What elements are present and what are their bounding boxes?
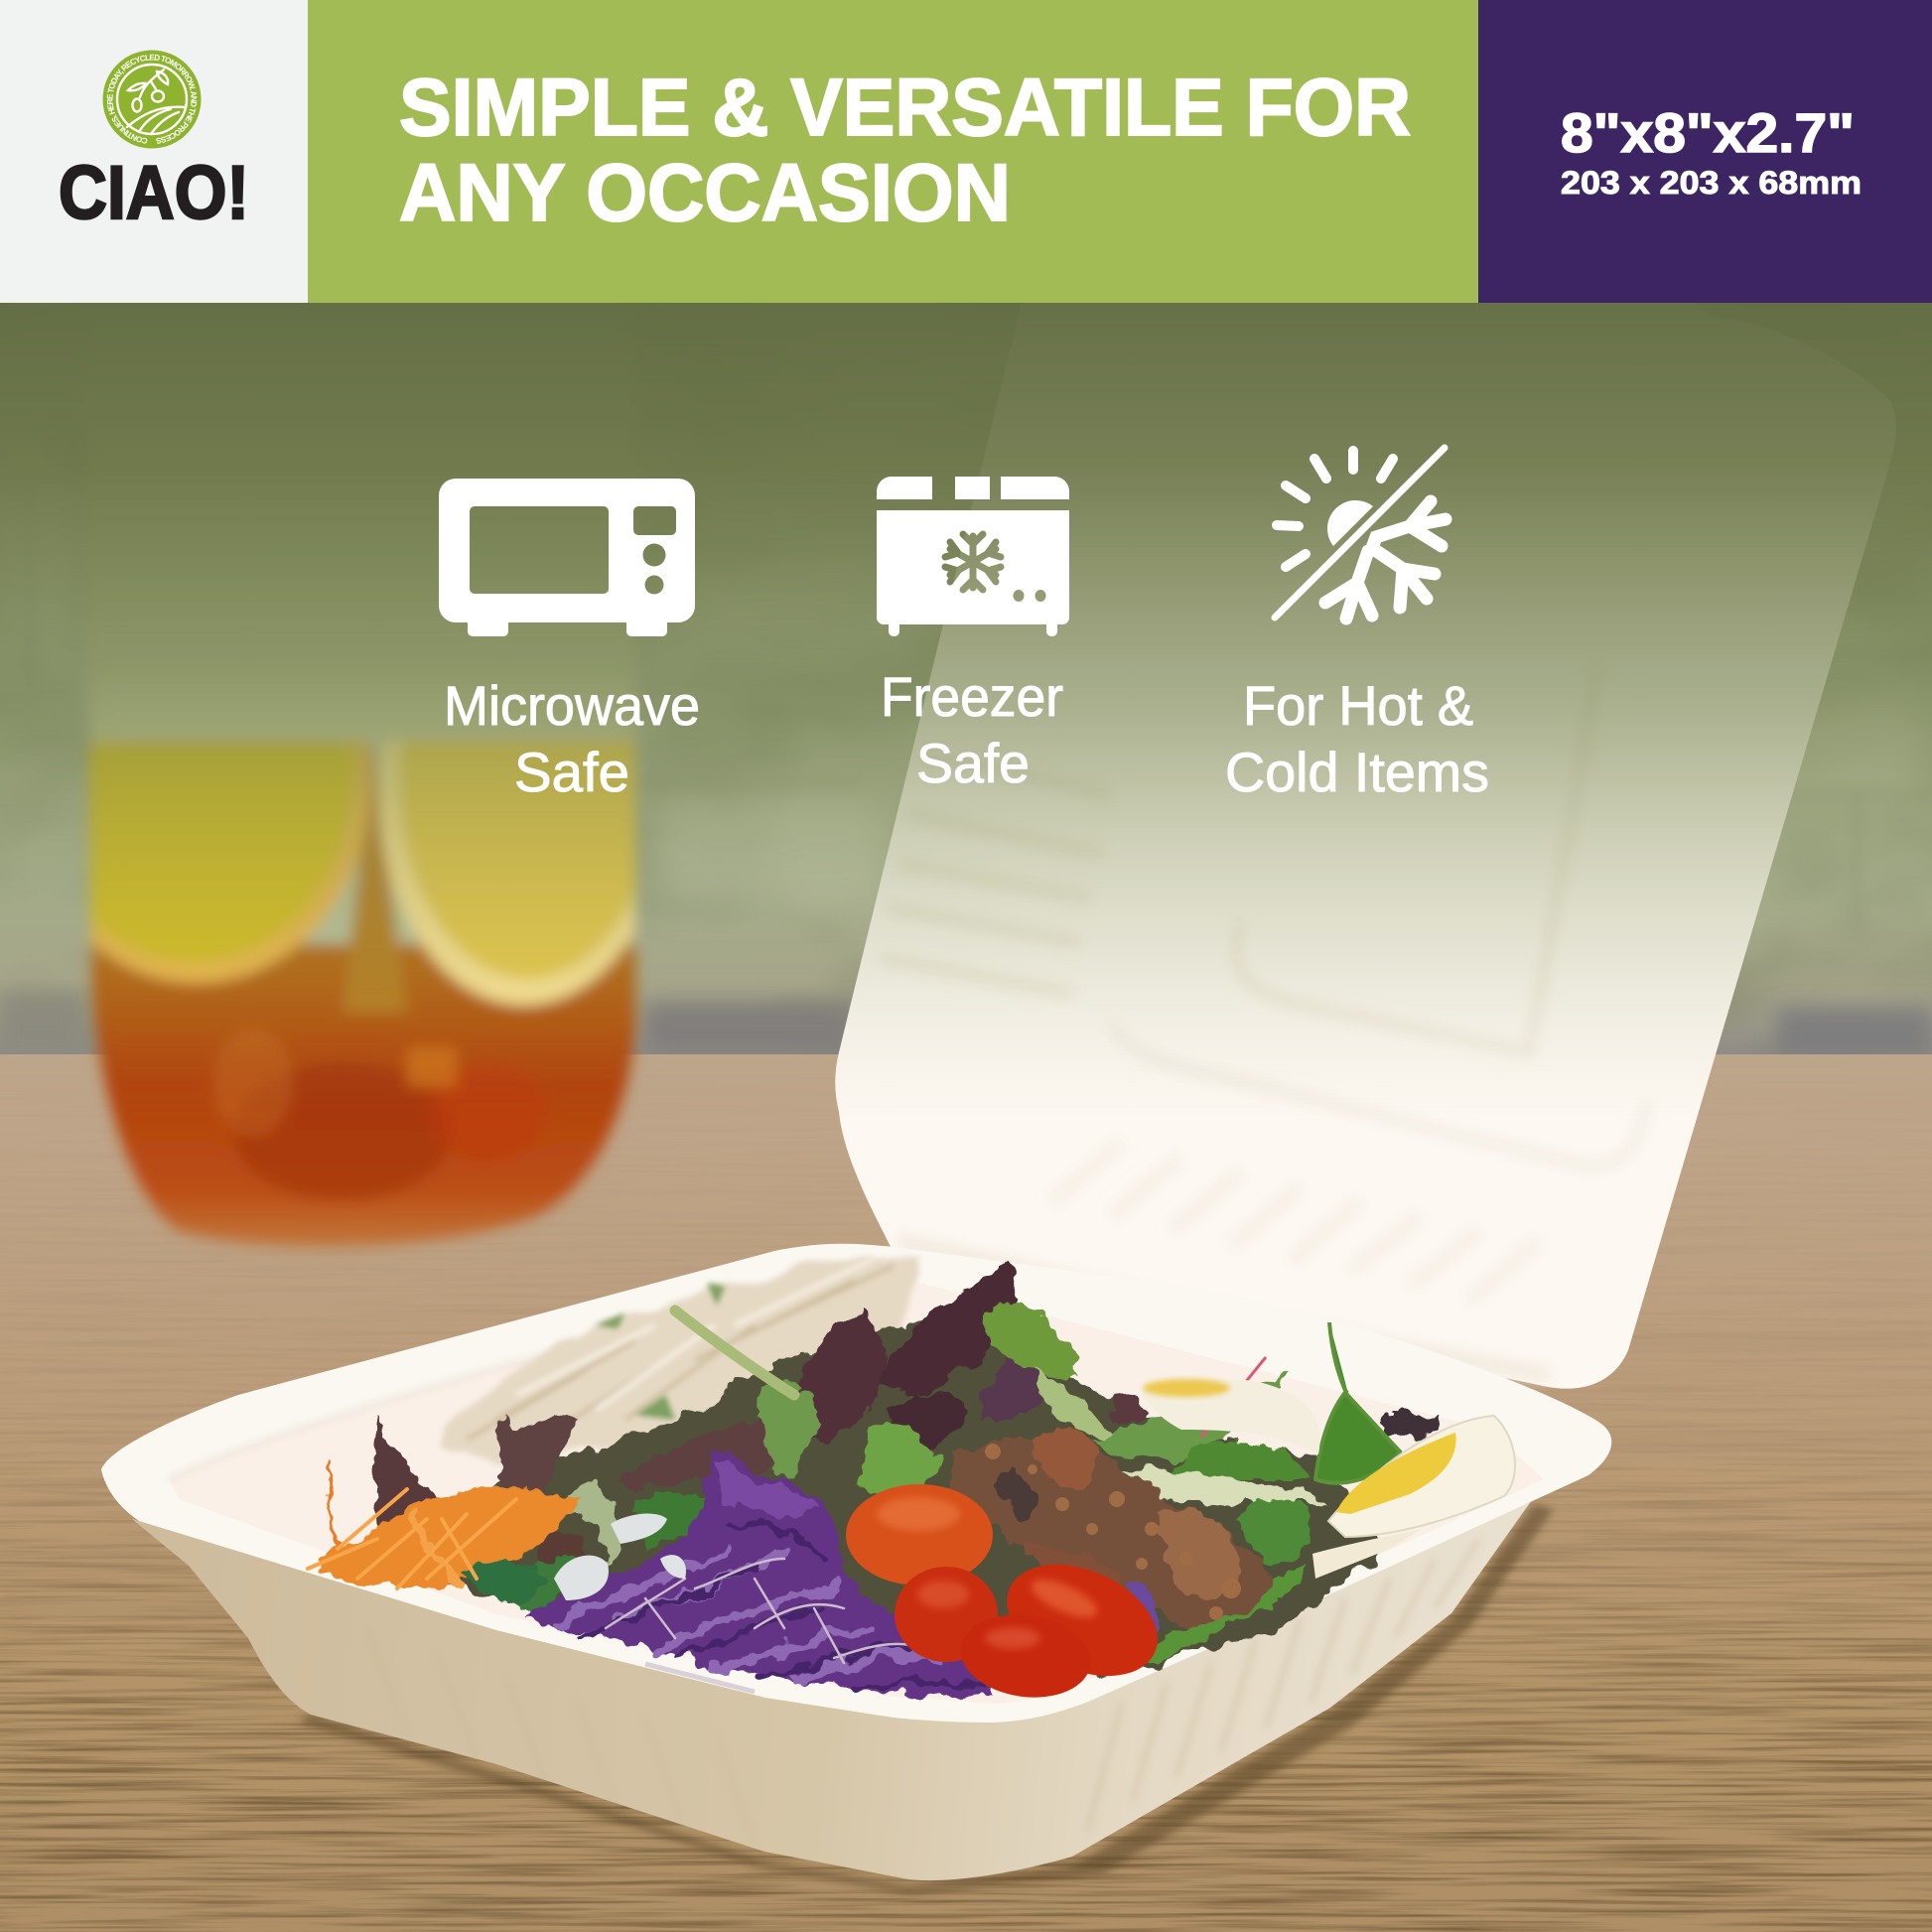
cabbage highlights xyxy=(606,1559,923,1663)
green leaf by carrots xyxy=(465,1561,544,1603)
hard boiled eggs xyxy=(1142,1379,1515,1579)
icon: freezer xyxy=(877,477,1069,636)
bacon crumbs xyxy=(985,1444,1241,1620)
green gradient overlay xyxy=(0,303,1932,1122)
bacon bits xyxy=(953,1429,1276,1638)
feature: microwave safe xyxy=(439,479,700,803)
leaves and base xyxy=(316,1263,1440,1700)
label: freezer safe: Freezer xyxy=(881,665,1063,728)
dimensions millimetres: 203 x 203 x 68mm xyxy=(1561,165,1862,201)
label: microwave safe xyxy=(444,674,700,803)
takeout tray shadow xyxy=(298,1504,1554,1894)
feature: hot and cold xyxy=(1225,448,1489,803)
label: microwave safe: Microwave xyxy=(444,674,700,737)
cherry tomatoes xyxy=(846,1484,1174,1706)
purple cabbage xyxy=(526,1449,993,1700)
frilly bright greens xyxy=(859,1299,1117,1496)
dark purple oak leaves xyxy=(374,1263,1440,1588)
label: freezer safe xyxy=(881,665,1063,794)
label: microwave safe: Safe xyxy=(514,741,629,803)
blue cheese xyxy=(554,1514,686,1600)
label: for hot and cold items: Cold Items xyxy=(1225,741,1489,803)
label: freezer safe: Safe xyxy=(916,732,1030,794)
salad xyxy=(308,1257,1515,1706)
carrot shreds xyxy=(308,1489,516,1588)
red chard stem xyxy=(1201,1357,1266,1437)
shredded chicken xyxy=(437,1257,918,1469)
icon: sun and snowflake xyxy=(1275,448,1446,619)
icon: microwave xyxy=(439,479,695,636)
right arugula leaf xyxy=(1315,1322,1400,1483)
header logo panel xyxy=(0,0,308,303)
dimensions inches: 8"x8"x2.7" xyxy=(1561,101,1855,164)
green stem xyxy=(675,1311,794,1395)
dark base greens xyxy=(427,1318,1390,1688)
takeout tray body xyxy=(132,1497,1534,1880)
brick wall xyxy=(0,298,1932,1072)
takeout tray rim and interior xyxy=(101,1244,1611,1723)
open clamshell lid xyxy=(835,298,1896,1389)
headline line 1: SIMPLE & VERSATILE FOR xyxy=(399,63,1411,153)
shredded carrots xyxy=(316,1469,581,1588)
header title panel xyxy=(308,0,1478,303)
feature: freezer safe xyxy=(877,477,1069,794)
header dimensions panel xyxy=(1478,0,1932,303)
logo wordmark: CIAO! xyxy=(59,151,249,235)
logo badge: CONTINUES. HERE TODAY, RECYCLED TOMORROW. AND THE PROCESS xyxy=(107,54,197,144)
iced tea glass xyxy=(80,582,645,1255)
headline line 2: ANY OCCASION xyxy=(399,148,1011,238)
label: for hot and cold items xyxy=(1225,674,1489,803)
label: for hot and cold items: For Hot & xyxy=(1243,674,1473,737)
romaine and spinach leaves xyxy=(501,1372,1329,1661)
wooden table xyxy=(0,1054,1932,1932)
